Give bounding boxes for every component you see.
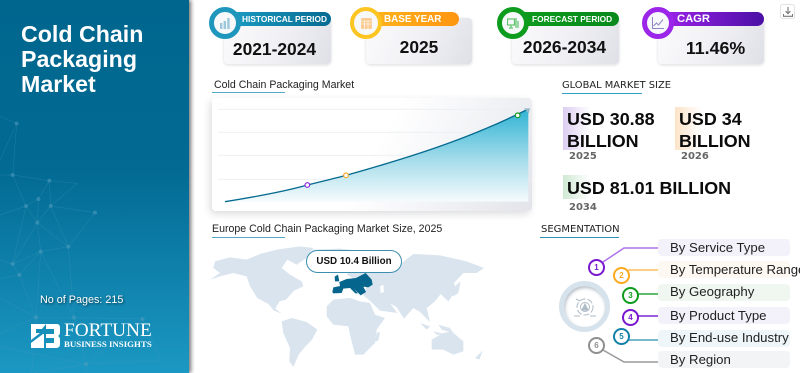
value: 2025: USD 30.88 <box>567 109 655 129</box>
pill <box>658 284 790 301</box>
value: 2025 <box>567 109 655 151</box>
panel: CAGR <box>642 7 765 66</box>
card <box>224 18 331 64</box>
number badge <box>613 328 630 345</box>
ribbon: FORECAST PERIOD <box>532 14 612 24</box>
ribbon: HISTORICAL PERIOD <box>242 14 327 24</box>
panel: historical period <box>209 7 332 66</box>
logo mark <box>31 324 60 348</box>
label: By End-use Industry <box>670 330 789 345</box>
number badge <box>613 267 630 284</box>
year: 2034: 2034 <box>569 202 597 213</box>
segment 5 <box>613 328 790 347</box>
logo tagline: BUSINESS INSIGHTS <box>64 339 152 349</box>
year: 2025: 2025 <box>569 151 597 162</box>
ribbon <box>667 12 764 26</box>
ribbon <box>233 12 331 26</box>
heading: segmentation: SEGMENTATION <box>541 224 620 235</box>
value: 11.46% <box>686 38 745 58</box>
segment 6 <box>588 337 790 368</box>
value: 2025: BILLION <box>567 131 639 151</box>
pill <box>658 351 790 368</box>
label: By Service Type <box>670 240 765 255</box>
tile: 2025 <box>563 107 590 150</box>
ribbon <box>521 12 619 26</box>
value: 2026: BILLION <box>679 131 751 151</box>
value: 2026: USD 34 <box>679 109 742 129</box>
heading: europe map: Europe Cold Chain Packaging Market Size, 2025 <box>212 223 442 235</box>
title: Market <box>21 71 96 97</box>
title: Cold Chain <box>21 21 143 47</box>
panel: base year <box>350 7 473 66</box>
number badge: 1 <box>594 262 599 272</box>
pill <box>658 307 790 324</box>
panel: left sidebar <box>0 0 189 373</box>
card <box>366 18 472 64</box>
tile: 2026 <box>675 107 702 150</box>
icon: growth chart <box>642 7 674 39</box>
callout: europe value <box>306 250 402 273</box>
value: 2034: USD 81.01 BILLION <box>567 178 731 198</box>
hub connectors <box>602 247 658 363</box>
number badge <box>622 309 639 326</box>
number badge: 5 <box>619 332 624 341</box>
panel: segmentation <box>559 247 658 363</box>
panel: line chart <box>212 98 532 211</box>
number badge <box>622 286 639 304</box>
callout: europe value: USD 10.4 Billion <box>316 256 392 267</box>
pill <box>658 330 790 347</box>
logo <box>31 320 152 349</box>
title: Packaging <box>21 46 137 72</box>
area chart <box>218 108 530 202</box>
network pattern <box>0 116 161 373</box>
segment 3 <box>622 284 790 304</box>
icon: calendar <box>350 7 382 39</box>
segment 1 <box>588 239 790 276</box>
value: 2026 <box>679 109 751 151</box>
pill <box>658 261 790 278</box>
number badge: 2 <box>619 271 624 280</box>
value: 2026-2034 <box>523 37 606 57</box>
pill <box>658 239 790 256</box>
value: 2021-2024 <box>233 39 316 59</box>
number badge: 4 <box>628 313 633 322</box>
value: 2025 <box>400 37 438 57</box>
world map <box>210 246 484 367</box>
label: By Geography <box>670 284 754 299</box>
pages note: No of Pages: 215 <box>40 294 123 306</box>
tile: 2034 <box>563 175 590 199</box>
panel: forecast period <box>497 7 620 66</box>
year: 2026: 2026 <box>681 151 709 162</box>
card <box>512 18 619 64</box>
label: By Region <box>670 352 731 367</box>
logo wordmark: FORTUNE <box>64 320 152 341</box>
icon: forecast chart <box>497 7 529 39</box>
title <box>21 21 143 97</box>
icon: bar chart <box>209 7 241 39</box>
segment 2 <box>613 261 800 284</box>
icon: download <box>780 4 795 19</box>
number badge: 3 <box>628 290 633 300</box>
ribbon: CAGR <box>677 13 710 25</box>
heading: line chart: Cold Chain Packaging Market <box>214 79 354 91</box>
ribbon <box>375 12 459 26</box>
panel: global market size <box>563 107 751 213</box>
ribbon: BASE YEAR <box>384 14 441 25</box>
number badge <box>588 258 605 276</box>
hub icon <box>559 281 610 332</box>
segment 4 <box>622 307 790 326</box>
number badge: 6 <box>594 341 599 350</box>
number badge <box>588 337 605 354</box>
card <box>658 18 764 64</box>
heading: global market size: GLOBAL MARKET SIZE <box>562 80 671 91</box>
label: By Product Type <box>670 308 767 323</box>
